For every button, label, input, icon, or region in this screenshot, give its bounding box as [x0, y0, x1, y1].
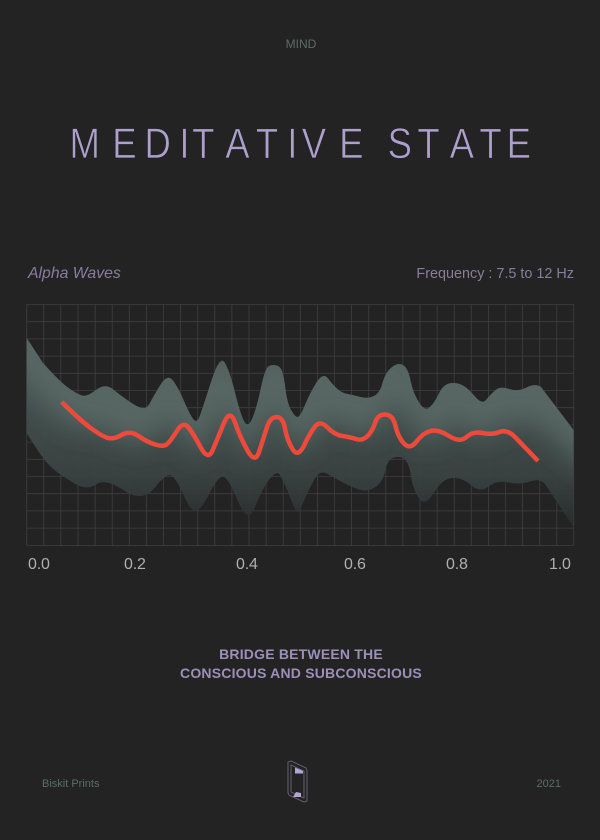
caption: BRIDGE BETWEEN THE — [219, 646, 383, 662]
subtitle: Alpha Waves: Alpha Waves — [27, 265, 121, 282]
footer: year: 2021 — [537, 778, 561, 790]
x axis labels: 0.8 — [446, 556, 468, 573]
chart grid — [27, 304, 574, 546]
x axis labels — [28, 556, 571, 573]
x axis labels: 0.2 — [124, 556, 146, 573]
caption — [180, 646, 422, 681]
wave envelope band — [26, 338, 574, 526]
red alpha wave line — [62, 402, 538, 461]
footer: publisher: Biskit Prints — [42, 778, 100, 790]
x axis labels: 0.6 — [344, 556, 366, 573]
caption: CONSCIOUS AND SUBCONSCIOUS — [180, 665, 422, 681]
x axis labels: 0.4 — [236, 556, 258, 573]
frequency label: Frequency : 7.5 to 12 Hz — [416, 266, 574, 282]
title: MEDITATIVE STATE — [69, 120, 531, 168]
x axis labels: 0.0 — [28, 556, 50, 573]
x axis labels: 1.0 — [549, 556, 571, 573]
wave chart — [26, 304, 574, 569]
icon: logo — [288, 761, 307, 802]
category label: MIND: MIND — [286, 37, 317, 51]
